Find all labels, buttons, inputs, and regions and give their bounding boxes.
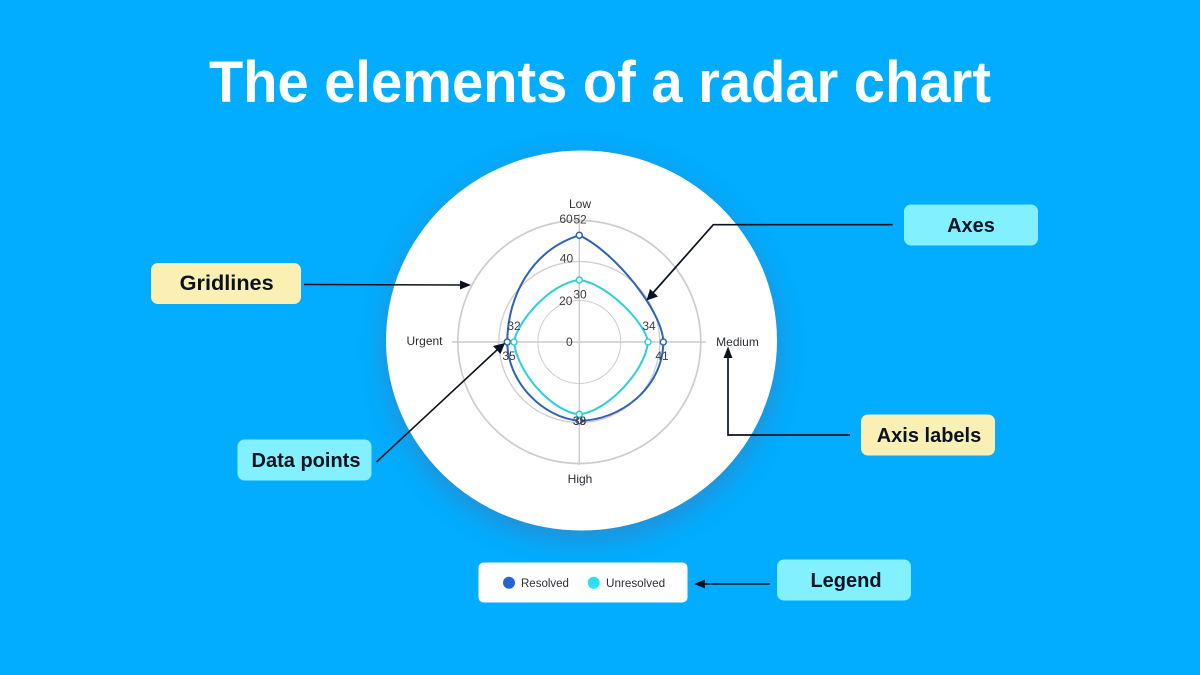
label: Axes: Axes	[947, 215, 995, 237]
axis labels: High	[568, 472, 592, 486]
series: Resolved	[504, 232, 666, 424]
scale and data value labels: 35	[502, 349, 516, 363]
axis labels: Urgent	[406, 334, 443, 348]
label: Legend	[777, 560, 911, 600]
circle shadow	[386, 158, 778, 540]
scale and data value labels: 41	[655, 349, 669, 363]
arrow: axes	[646, 225, 893, 300]
label: Gridlines: Gridlines	[180, 272, 274, 295]
scale and data value labels: 32	[507, 319, 521, 333]
scale and data value labels: 60	[559, 212, 573, 226]
arrow: gridlines	[304, 280, 471, 290]
scale and data value labels: 34	[642, 319, 656, 333]
scale and data value labels: 30	[573, 288, 587, 302]
axis labels	[406, 197, 759, 486]
scale and data value labels: 39	[573, 414, 586, 428]
axis labels: Low	[569, 197, 591, 211]
legend item: Unresolved: Unresolved	[606, 577, 665, 590]
arrow: data points	[376, 343, 505, 462]
panel: radar chart	[386, 150, 777, 530]
panel: legend	[478, 562, 688, 602]
scale and data value labels: 52	[573, 212, 587, 226]
legend item: Resolved	[503, 577, 569, 590]
label: Data points	[238, 440, 372, 480]
arrow: legend	[694, 580, 770, 588]
scale and data value labels: 20	[559, 294, 573, 308]
gridlines	[458, 220, 701, 464]
arrow: axis labels	[724, 346, 850, 435]
label: Axes	[904, 204, 1038, 246]
legend item: Resolved: Resolved	[521, 578, 569, 590]
axes	[452, 214, 706, 465]
label: Axis labels	[861, 414, 995, 456]
scale and data value labels: 38	[573, 414, 586, 428]
scale and data value labels	[502, 212, 669, 428]
title: The elements of a radar chart	[209, 50, 991, 115]
label: Axis labels: Axis labels	[877, 425, 981, 447]
label: Data points: Data points	[252, 450, 360, 472]
axis labels: Medium	[716, 335, 759, 349]
scale and data value labels: 0	[566, 335, 573, 349]
scale and data value labels: 40	[560, 252, 573, 266]
white circular backdrop	[386, 150, 777, 530]
series: Unresolved	[511, 277, 651, 417]
label: Legend: Legend	[810, 570, 882, 592]
label: Gridlines	[151, 263, 301, 304]
